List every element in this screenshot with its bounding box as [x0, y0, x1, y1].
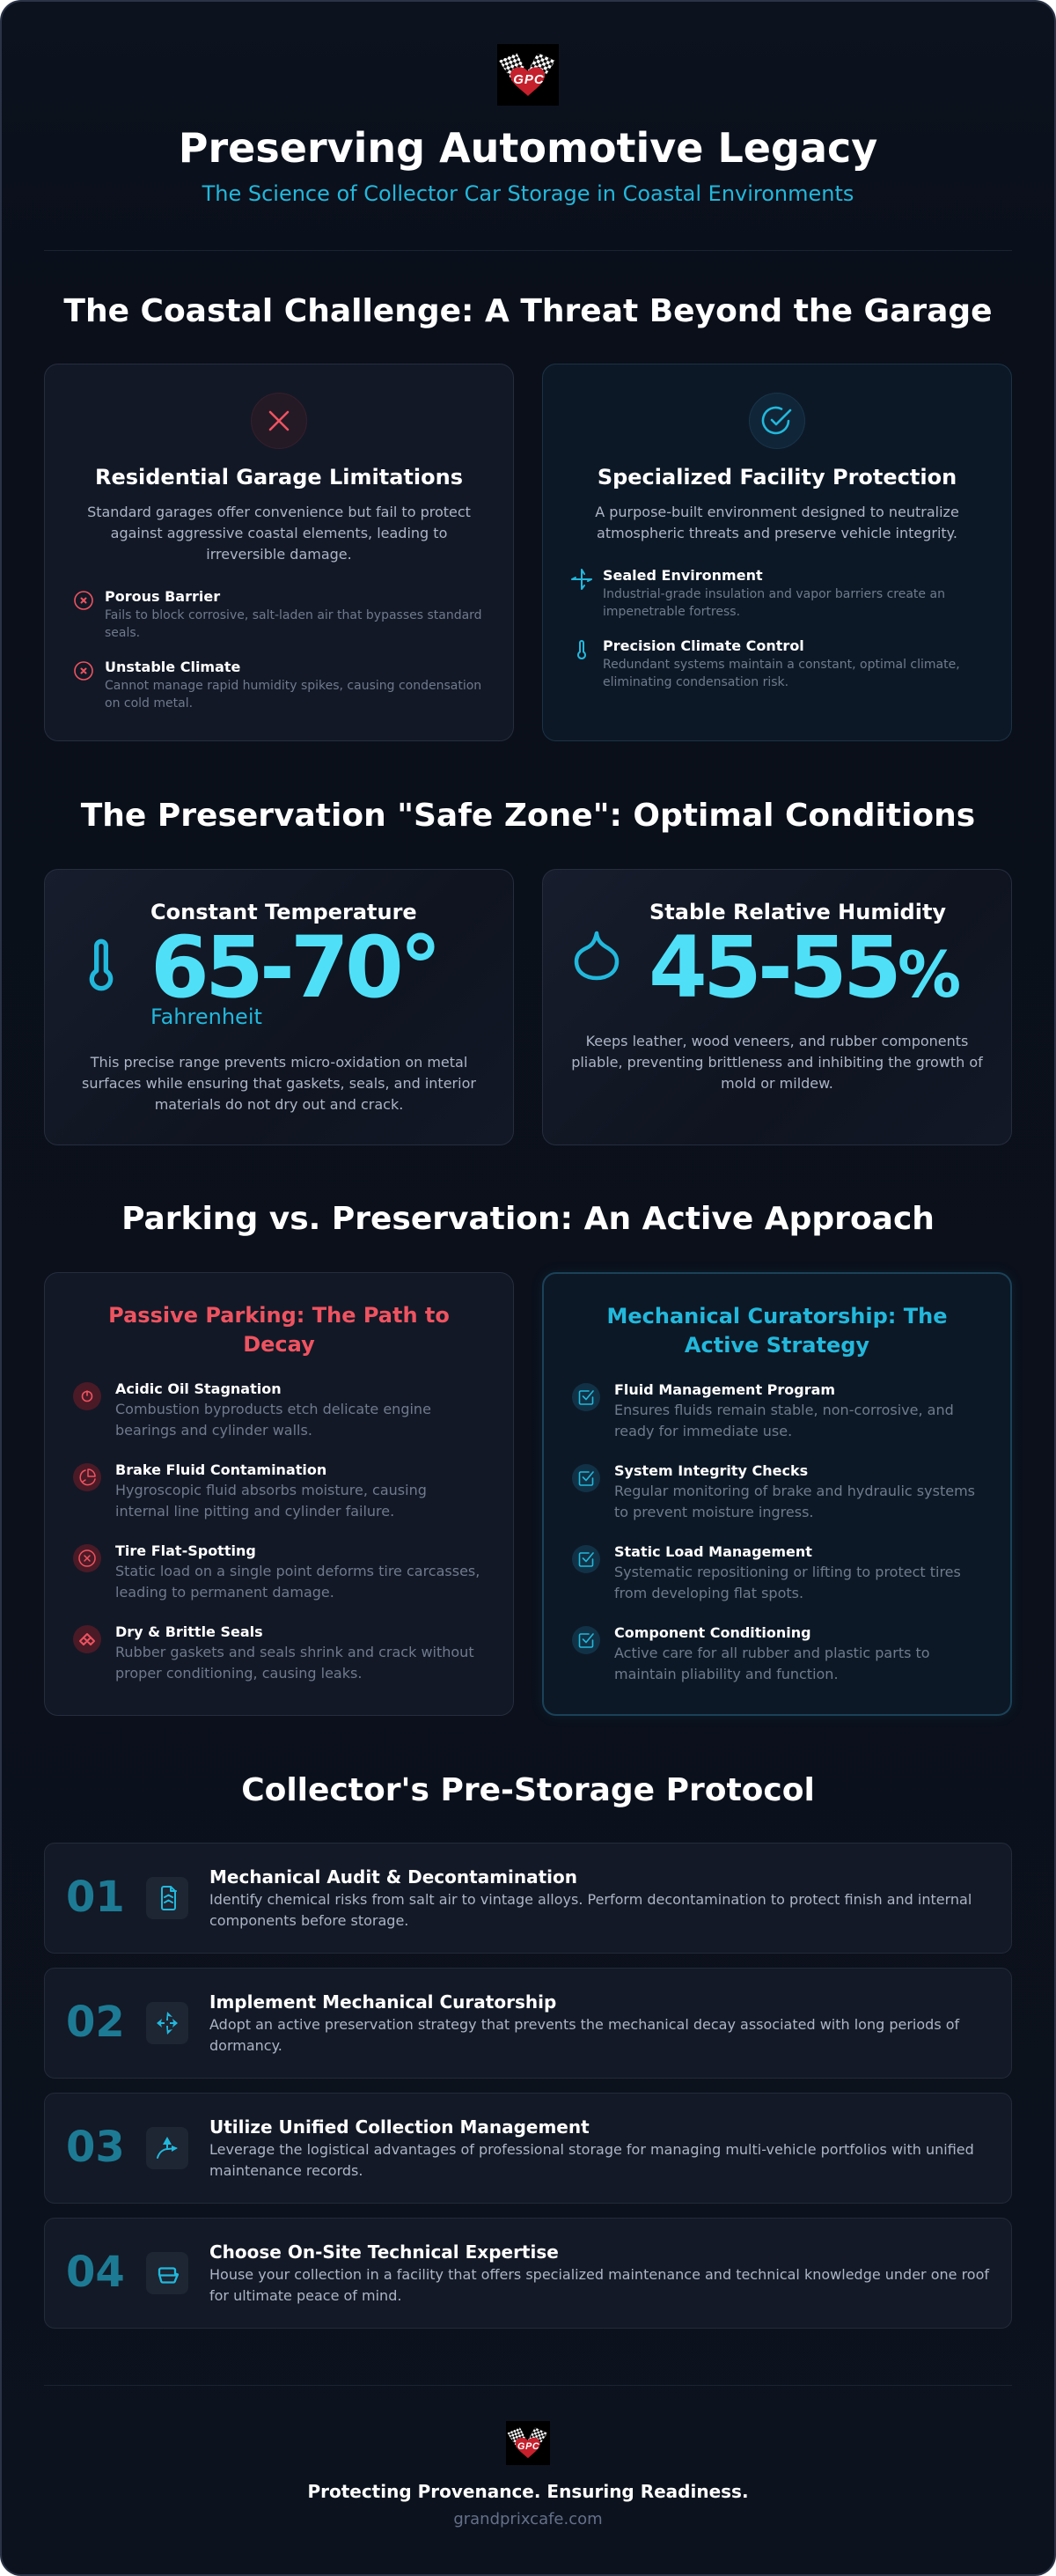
item: system integrity: to prevent moisture ingress. [614, 1504, 813, 1520]
icon: diamonds [73, 1625, 101, 1653]
item: system integrity [572, 1462, 975, 1520]
item: dry seals: Rubber gaskets and seals shrink and crack without [115, 1644, 474, 1660]
description: surfaces while ensuring that gaskets, seals, and interior [82, 1075, 476, 1092]
item: static load [572, 1543, 961, 1601]
step 02 [44, 1968, 1012, 2079]
panel: passive parking [44, 1272, 514, 1716]
item: sealed environment: Industrial-grade insulation and vapor barriers create an [603, 587, 945, 601]
icon: timer [73, 1382, 101, 1410]
step 04: Choose On-Site Technical Expertise [209, 2241, 559, 2263]
icon: checkbox [572, 1383, 600, 1411]
step 03: Leverage the logistical advantages of professional storage for managing multi-vehicle portfolios with unified [209, 2141, 974, 2158]
icon: checkbox [572, 1626, 600, 1654]
item: acidic oil: Acidic Oil Stagnation [115, 1380, 282, 1397]
subtitle: The Science of Collector Car Storage in Coastal Environments [202, 181, 854, 206]
icon: checkbox [572, 1545, 600, 1573]
step 03 [44, 2093, 1012, 2204]
card description: irreversible damage. [206, 546, 352, 563]
panel heading: Mechanical Curatorship: The [607, 1304, 947, 1328]
item: tire flat-spotting: Tire Flat-Spotting [115, 1542, 256, 1559]
item: acidic oil: Combustion byproducts etch delicate engine [115, 1401, 431, 1417]
card description [595, 504, 959, 541]
footer tagline: Protecting Provenance. Ensuring Readiness. [307, 2481, 749, 2502]
step 03: maintenance records. [209, 2162, 363, 2179]
item: porous barrier: Porous Barrier [105, 588, 220, 605]
item: sealed environment: Sealed Environment [603, 567, 763, 584]
icon: move arrows [571, 569, 592, 590]
icon: checkbox [572, 1464, 600, 1492]
item: system integrity: Regular monitoring of brake and hydraulic systems [614, 1483, 975, 1499]
title: Preserving Automotive Legacy [179, 124, 877, 172]
item: sealed environment: impenetrable fortress. [603, 605, 740, 619]
item: static load: Static Load Management [614, 1543, 812, 1560]
header logo [497, 44, 559, 106]
panel: humidity [542, 869, 1012, 1145]
item: unstable climate: Unstable Climate [105, 659, 240, 675]
item: system integrity: System Integrity Checks [614, 1462, 808, 1479]
description: mold or mildew. [721, 1075, 833, 1092]
item: component conditioning: Component Conditioning [614, 1624, 811, 1641]
step 04 [44, 2218, 1012, 2329]
card heading: Residential Garage Limitations [95, 465, 463, 489]
panel: specialized facility [542, 364, 1012, 741]
item: unstable climate [74, 659, 481, 710]
item: unstable climate: on cold metal. [105, 696, 193, 710]
item: dry seals: proper conditioning, causing leaks. [115, 1665, 362, 1682]
icon: x circle small [74, 591, 93, 610]
panel: temperature [44, 869, 514, 1145]
description: Keeps leather, wood veneers, and rubber components [586, 1033, 968, 1049]
panel heading [607, 1304, 947, 1358]
step 04: 04 [66, 2248, 125, 2297]
description [82, 1054, 476, 1113]
item: fluid management: Ensures fluids remain stable, non-corrosive, and [614, 1402, 954, 1418]
step 01 [44, 1843, 1012, 1954]
card description [87, 504, 471, 563]
step 01: 01 [66, 1873, 125, 1922]
description [571, 1033, 984, 1092]
item: static load: Systematic repositioning or lifting to protect tires [614, 1564, 961, 1580]
icon: file [146, 1877, 188, 1919]
step 01: components before storage. [209, 1912, 408, 1929]
item: precision climate [577, 637, 960, 689]
icon: arrows [146, 2002, 188, 2044]
item: tire flat-spotting [73, 1542, 480, 1601]
item: brake fluid [73, 1461, 427, 1520]
footer website: grandprixcafe.com [453, 2510, 603, 2528]
step 04: House your collection in a facility that offers specialized maintenance and technical knowledge under one roof [209, 2266, 989, 2283]
panel: residential garage [44, 364, 514, 741]
item: porous barrier [74, 588, 482, 640]
icon: pie chart [73, 1463, 101, 1491]
stat: humidity range: 45-55% [649, 918, 957, 1017]
step 02: dormancy. [209, 2037, 282, 2054]
icon: x circle [73, 1544, 101, 1572]
item: precision climate: Redundant systems maintain a constant, optimal climate, [603, 658, 960, 672]
step 03: Utilize Unified Collection Management [209, 2116, 590, 2138]
step 03: 03 [66, 2123, 125, 2172]
icon: thermometer [90, 938, 113, 991]
heading: protocol: Collector's Pre-Storage Protocol [241, 1772, 815, 1808]
step 01: Mechanical Audit & Decontamination [209, 1866, 577, 1888]
item: dry seals [73, 1623, 474, 1682]
item: component conditioning [572, 1624, 930, 1682]
item: fluid management [572, 1381, 954, 1439]
panel heading: Passive Parking: The Path to [108, 1303, 450, 1328]
item: brake fluid: Hygroscopic fluid absorbs moisture, causing [115, 1482, 427, 1498]
item: dry seals: Dry & Brittle Seals [115, 1623, 263, 1640]
panel: mechanical curatorship [542, 1272, 1012, 1716]
item: fluid management: Fluid Management Program [614, 1381, 835, 1398]
item: porous barrier: seals. [105, 626, 140, 640]
item: acidic oil: bearings and cylinder walls. [115, 1422, 312, 1439]
icon: droplet [574, 931, 620, 981]
item: precision climate: eliminating condensation risk. [603, 675, 788, 689]
step 02: 02 [66, 1998, 125, 2047]
item: brake fluid: internal line pitting and cylinder failure. [115, 1503, 394, 1520]
item: static load: from developing flat spots. [614, 1585, 803, 1601]
footer logo [506, 2421, 550, 2465]
item: component conditioning: maintain pliability and function. [614, 1666, 839, 1682]
step 02: Adopt an active preservation strategy that prevents the mechanical decay associated with long periods of [209, 2016, 959, 2033]
card description: against aggressive coastal elements, leading to [111, 525, 447, 541]
item: tire flat-spotting: Static load on a single point deforms tire carcasses, [115, 1563, 480, 1579]
panel heading: Decay [243, 1332, 315, 1357]
item: tire flat-spotting: leading to permanent damage. [115, 1584, 334, 1601]
description: This precise range prevents micro-oxidation on metal [91, 1054, 467, 1071]
card description: Standard garages offer convenience but fail to protect [87, 504, 471, 520]
description: pliable, preventing brittleness and inhibiting the growth of [571, 1054, 983, 1071]
icon: branch arrow [146, 2127, 188, 2169]
item: unstable climate: Cannot manage rapid humidity spikes, causing condensation [105, 679, 481, 693]
header logo: GPC [513, 72, 545, 87]
item: component conditioning: Active care for all rubber and plastic parts to [614, 1645, 930, 1661]
icon: x circle small [74, 661, 93, 681]
item: acidic oil [73, 1380, 431, 1439]
item: porous barrier: Fails to block corrosive, salt-laden air that bypasses standard [105, 608, 482, 622]
item: fluid management: ready for immediate use. [614, 1423, 792, 1439]
step 04: for ultimate peace of mind. [209, 2287, 401, 2304]
unit: Fahrenheit [150, 1005, 262, 1029]
item: precision climate: Precision Climate Control [603, 637, 804, 654]
label: Constant Temperature [150, 900, 417, 924]
icon: check circle [749, 393, 805, 449]
icon: x circle [251, 393, 307, 449]
panel heading: Active Strategy [685, 1333, 869, 1358]
stat: temperature range: 65-70° [150, 918, 437, 1017]
label: Stable Relative Humidity [649, 900, 946, 924]
footer logo: GPC [517, 2441, 539, 2452]
card description: A purpose-built environment designed to neutralize [595, 504, 959, 520]
icon: seat [146, 2252, 188, 2294]
step 01: Identify chemical risks from salt air to vintage alloys. Perform decontamination to protect finish and internal [209, 1891, 972, 1908]
item: brake fluid: Brake Fluid Contamination [115, 1461, 326, 1478]
item: sealed environment [571, 567, 945, 619]
description: materials do not dry out and crack. [155, 1096, 403, 1113]
heading: coastal challenge: The Coastal Challenge: A Threat Beyond the Garage [63, 293, 993, 329]
card description: atmospheric threats and preserve vehicle integrity. [597, 525, 957, 541]
heading: safe zone: The Preservation "Safe Zone": Optimal Conditions [81, 798, 975, 834]
heading: parking vs preservation: Parking vs. Preservation: An Active Approach [121, 1201, 935, 1237]
step 02: Implement Mechanical Curatorship [209, 1991, 556, 2013]
panel heading [108, 1303, 450, 1357]
icon: thermometer small [577, 640, 586, 659]
card heading: Specialized Facility Protection [598, 465, 957, 489]
